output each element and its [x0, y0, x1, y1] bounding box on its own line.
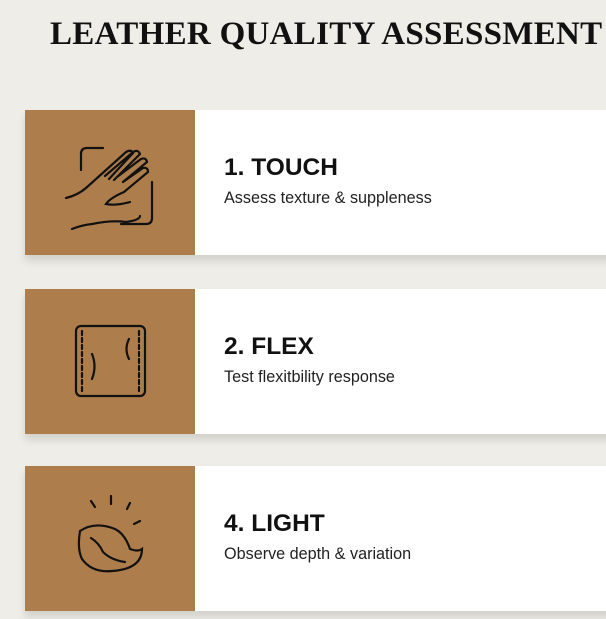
icon: light on leather: [25, 466, 195, 611]
card: touch: [25, 110, 606, 255]
heading: 1. TOUCH: [224, 154, 338, 181]
text: Test flexitbility response: [224, 368, 395, 386]
heading: 2. FLEX: [224, 333, 314, 360]
text: Assess texture & suppleness: [224, 189, 432, 207]
card: flex: [25, 289, 606, 434]
card: light: [25, 466, 606, 611]
title: LEATHER QUALITY ASSESSMENT: [50, 16, 602, 52]
icon: flex square: [25, 289, 195, 434]
heading: 4. LIGHT: [224, 510, 325, 537]
text: Observe depth & variation: [224, 545, 411, 563]
icon: hand: [25, 110, 195, 255]
